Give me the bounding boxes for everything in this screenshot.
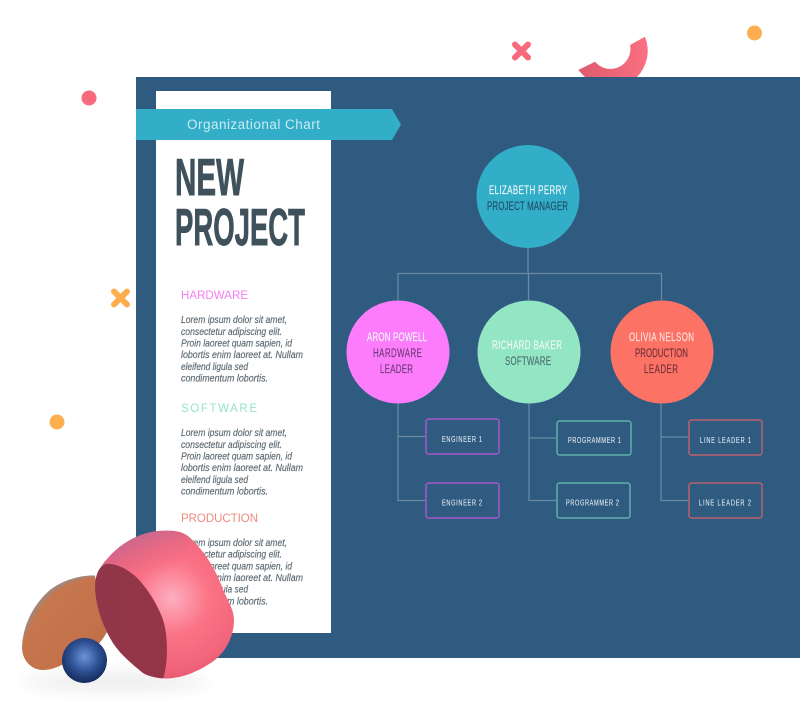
box: line leader 1: [689, 420, 762, 455]
box: line leader 2: LINE LEADER 2: [699, 500, 751, 508]
box: programmer 1: [557, 421, 631, 455]
node: project manager: [476, 145, 580, 248]
org chart connector lines: [398, 248, 689, 500]
title: NEW: [175, 149, 245, 207]
box: line leader 1: LINE LEADER 1: [700, 437, 751, 445]
white sidebar panel: [156, 91, 331, 633]
title: PROJECT: [175, 199, 305, 257]
box: engineer 2: [426, 483, 499, 518]
box: programmer 1: PROGRAMMER 1: [568, 437, 621, 445]
box: programmer 2: PROGRAMMER 2: [566, 500, 619, 508]
node: project manager: PROJECT MANAGER: [487, 201, 568, 214]
body text: software: Proin laoreet quam sapien, id: [181, 452, 292, 462]
box: engineer 2: ENGINEER 2: [442, 500, 482, 508]
decorative cross: orange: [114, 292, 127, 304]
3D shapes illustration: [20, 531, 234, 690]
body text: hardware: condimentum lobortis.: [181, 374, 268, 384]
body text: software: condimentum lobortis.: [181, 486, 268, 498]
heading: hardware: HARDWARE: [181, 290, 248, 302]
decorative dot: red: [82, 90, 96, 106]
node: hardware leader: LEADER: [380, 364, 413, 377]
hemisphere cut face: [95, 564, 167, 678]
body text: hardware: [181, 315, 303, 384]
section: hardware: [181, 290, 303, 384]
decorative dot: orange top right: [747, 26, 762, 40]
section: production: [181, 513, 303, 607]
node: production leader: [610, 300, 714, 404]
node: production leader: PRODUCTION: [635, 348, 688, 361]
node: hardware leader: [346, 300, 450, 404]
body text: software: eleifend ligula sed: [181, 475, 248, 486]
section: software: [181, 403, 303, 498]
heading: production: PRODUCTION: [181, 513, 258, 525]
decorative cross: pink: [515, 44, 528, 58]
body text: production: Proin laoreet quam sapien, id: [181, 561, 292, 572]
ribbon text: Organizational Chart: [187, 117, 320, 132]
node: software leader: RICHARD BAKER: [492, 340, 562, 353]
body text: production: lobortis enim laoreet at. Nullam: [181, 573, 303, 584]
node: production leader: LEADER: [644, 364, 678, 377]
body text: production: eleifend ligula sed: [181, 585, 248, 596]
body text: hardware: lobortis enim laoreet at. Nullam: [181, 350, 303, 361]
body text: software: consectetur adipiscing elit.: [181, 440, 282, 451]
node: software leader: SOFTWARE: [505, 356, 551, 369]
node: production leader: OLIVIA NELSON: [629, 332, 694, 345]
ground shadow: [20, 674, 210, 690]
3D sphere: blue: [62, 638, 107, 683]
box: engineer 1: ENGINEER 1: [442, 436, 482, 444]
main navy panel: [136, 77, 800, 658]
3D hemisphere: pink: [95, 531, 234, 678]
node: project manager: ELIZABETH PERRY: [489, 185, 567, 198]
3D half disc: orange: [22, 575, 107, 670]
body text: software: lobortis enim laoreet at. Nullam: [181, 463, 303, 474]
decorative dot: orange left: [50, 414, 64, 430]
body text: hardware: Proin laoreet quam sapien, id: [181, 338, 292, 350]
box: line leader 2: [689, 483, 762, 518]
ribbon banner: [136, 109, 401, 140]
node: software leader: [478, 300, 580, 404]
heading: software: SOFTWARE: [181, 403, 257, 415]
body text: hardware: eleifend ligula sed: [181, 362, 248, 373]
body text: production: [181, 538, 303, 607]
box: programmer 2: [557, 483, 630, 518]
body text: production: Lorem ipsum dolor sit amet,: [181, 538, 287, 549]
body text: hardware: consectetur adipiscing elit.: [181, 327, 282, 338]
node: hardware leader: HARDWARE: [373, 348, 422, 361]
box: engineer 1: [426, 419, 499, 454]
body text: production: condimentum lobortis.: [181, 596, 268, 607]
body text: software: [181, 428, 303, 498]
decorative ring segment: [578, 37, 648, 77]
body text: production: consectetur adipiscing elit.: [181, 550, 282, 561]
hemisphere top shading: [95, 531, 193, 590]
body text: software: Lorem ipsum dolor sit amet,: [181, 428, 287, 439]
title: [175, 149, 305, 257]
node: hardware leader: ARON POWELL: [367, 332, 427, 345]
body text: hardware: Lorem ipsum dolor sit amet,: [181, 315, 287, 326]
